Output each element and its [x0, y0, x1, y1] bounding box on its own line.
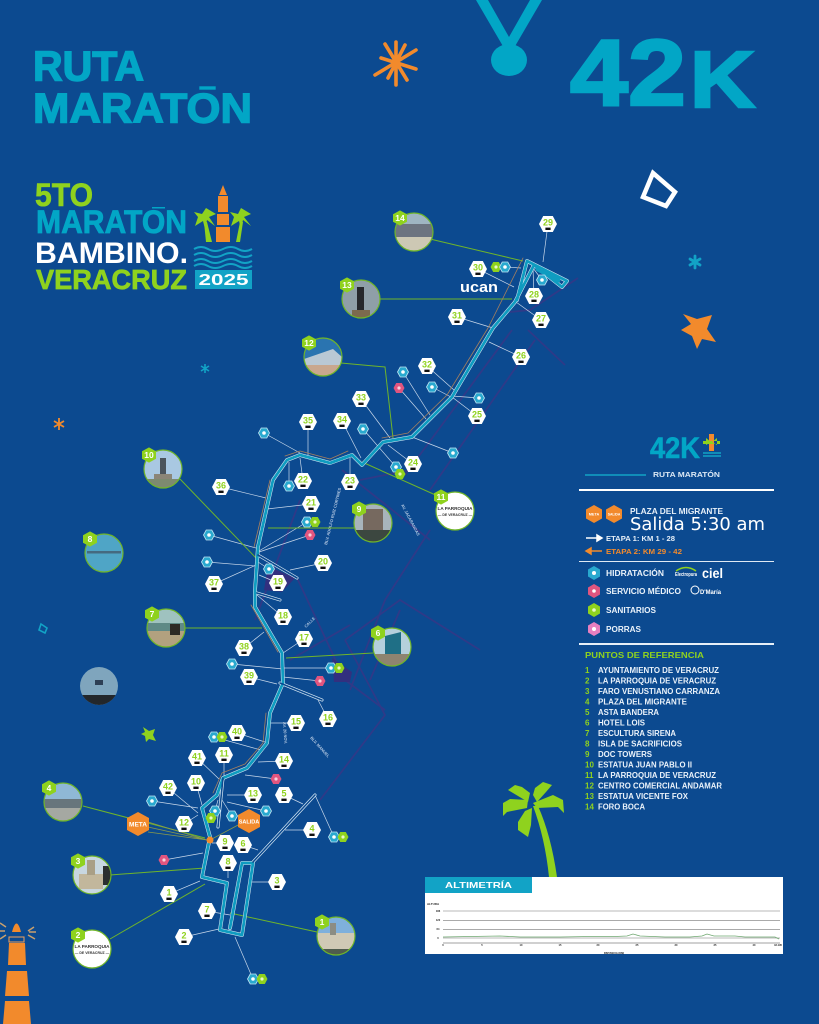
- kilometre markers: 26: [516, 350, 526, 360]
- photo 6: Hotel Lois: 6: [376, 628, 381, 638]
- kilometre markers: 27: [536, 314, 546, 324]
- kilometre markers: 16: [323, 712, 333, 722]
- kilometre markers: 2: [181, 930, 187, 940]
- x axis labels: 5: [481, 943, 483, 947]
- marker: meta: META: [129, 822, 147, 828]
- x axis labels: 10: [520, 943, 523, 947]
- y axis labels: 0: [437, 936, 439, 940]
- kilometre markers: 19: [273, 576, 283, 586]
- kilometre markers: 3: [274, 876, 280, 886]
- logo: 5to Maratón Bambino Veracruz 2025: 5TO: [35, 177, 93, 213]
- kilometre markers: 34: [337, 414, 347, 424]
- x axis labels: 15: [559, 943, 562, 947]
- list: reference points: LA PARROQUIA DE VERACRUZ: [598, 676, 716, 686]
- list: reference points: 6: [585, 718, 590, 728]
- icon: mini lighthouse and palms: [703, 434, 721, 456]
- legend: stage 1: ETAPA 1: KM 1 - 28: [606, 534, 675, 543]
- divider: [579, 489, 774, 491]
- kilometre markers: 40: [232, 726, 242, 736]
- leader lines: white: [152, 224, 548, 979]
- y axis labels: 64: [437, 927, 440, 931]
- photo 4: Plaza del Migrante: [42, 780, 82, 821]
- icon: toilets: [588, 603, 600, 617]
- icon: small diamond left: [39, 624, 47, 633]
- photo 11: La Parroquia: LA PARROQUIA: [438, 506, 473, 511]
- kilometre markers: 42: [163, 782, 173, 792]
- legend: plaza: PLAZA DEL MIGRANTE: [630, 506, 723, 516]
- icon: white arrow: [586, 535, 602, 541]
- photo 9: Doc Towers: 9: [357, 504, 362, 514]
- x axis labels: 35: [714, 943, 717, 947]
- list: reference points: 7: [585, 729, 590, 738]
- list: reference points: ISLA DE SACRIFICIOS: [598, 740, 683, 748]
- divider: [579, 561, 774, 562]
- photo 2: La Parroquia: LA PARROQUIA: [75, 944, 110, 949]
- kilometre markers: 23: [345, 476, 355, 486]
- photo 8: Isla de Sacrificios: [83, 531, 123, 572]
- icon: small orange star left: [54, 418, 64, 430]
- marker: meta: [127, 812, 149, 836]
- logo: D'María: D'María: [700, 589, 721, 596]
- photo 8: Isla de Sacrificios: 8: [88, 534, 93, 544]
- logo: 5to Maratón Bambino Veracruz 2025: [35, 177, 252, 295]
- photo 12: Centro Comercial Andamar: [302, 335, 342, 376]
- list: reference points: 3: [585, 687, 590, 696]
- icon: logo lighthouse: [216, 185, 230, 242]
- kilometre markers: 14: [279, 754, 289, 764]
- heading: 42K: K: [690, 35, 755, 124]
- list: reference points: 11: [585, 771, 594, 780]
- photo 7: Escultura Sirena: [145, 606, 185, 647]
- route line: [202, 258, 567, 935]
- legend: start time: Salida 5:30 am: [630, 514, 765, 535]
- photo 14: Foro Boca: [393, 210, 433, 251]
- icon: lighthouse bottom-left: [0, 923, 36, 1024]
- kilometre markers: 17: [299, 632, 309, 642]
- kilometre markers: 7: [204, 904, 210, 914]
- x axis labels: 25: [636, 943, 639, 947]
- icon: white diamond: [643, 173, 675, 206]
- legend: services: [588, 565, 723, 636]
- legend: cheering: PORRAS: [606, 625, 642, 634]
- photo 2: La Parroquia: [71, 927, 111, 968]
- axis title: ALTURA: [427, 902, 440, 906]
- icon: large palm tree: [503, 782, 564, 877]
- kilometre markers: 28: [529, 290, 539, 300]
- icon: cheering: [588, 622, 600, 636]
- list: reference points: 14: [585, 802, 594, 812]
- photo 10: Estatua Juan Pablo II: 10: [144, 450, 154, 460]
- photo 3: Faro Venustiano Carranza: [71, 853, 111, 894]
- list: reference points: AYUNTAMIENTO DE VERACRUZ: [598, 666, 719, 675]
- icon: orange arrow: [586, 548, 602, 554]
- list: reference points: 13: [585, 792, 594, 801]
- kilometre markers: 9: [222, 836, 228, 846]
- list: reference points: ESTATUA VICENTE FOX: [598, 792, 689, 801]
- kilometre markers: 6: [240, 838, 246, 848]
- x axis labels: 30: [675, 943, 678, 947]
- x axis title: DISTANCIA (KM): [604, 951, 624, 955]
- icon: medal: [476, 0, 542, 76]
- photo 10: Estatua Juan Pablo II: [142, 447, 182, 488]
- photo 14: Foro Boca: 14: [395, 213, 405, 223]
- kilometre markers: 11: [219, 748, 229, 758]
- list: reference points: CENTRO COMERCIAL ANDAMAR: [598, 782, 722, 790]
- list: reference points: ESCULTURA SIRENA: [598, 729, 676, 738]
- y axis labels: [436, 909, 441, 940]
- altimetry tab: [425, 877, 532, 893]
- icon: logo waves: [194, 247, 252, 268]
- hydration, medical and toilet markers: [146, 262, 548, 984]
- x axis labels: 20: [597, 943, 600, 947]
- list: reference points: ASTA BANDERA: [598, 708, 659, 717]
- list: reference points: 1: [585, 666, 590, 675]
- photo 4: Plaza del Migrante: 4: [47, 783, 52, 793]
- list: reference points: HOTEL LOIS: [598, 718, 646, 728]
- icon: small teal star: [690, 256, 700, 268]
- list: reference points: LA PARROQUIA DE VERACRUZ: [598, 771, 716, 780]
- y axis labels: 122: [436, 918, 441, 922]
- kilometre markers: 37: [209, 578, 219, 588]
- text: avenue labels: BLV. MANUEL: [309, 735, 331, 759]
- photo 11: La Parroquia: — DE VERACRUZ —: [438, 513, 473, 517]
- legend: meta hex: META: [589, 512, 599, 516]
- legend: route label: RUTA MARATÓN: [653, 470, 720, 479]
- photo 2: La Parroquia: 2: [76, 930, 81, 940]
- text: avenue labels: [282, 487, 421, 759]
- legend: salida hex: SALIDA: [608, 512, 621, 516]
- photo 1: Ayuntamiento de Veracruz: 1: [320, 917, 325, 927]
- photo 13: Estatua Vicente Fox: [340, 277, 380, 318]
- kilometre markers: 33: [356, 392, 366, 402]
- leader lines: green: [83, 239, 523, 939]
- x axis labels: 42.195: [774, 943, 783, 947]
- title: Ruta Maratón: MARATON: [33, 84, 252, 132]
- marker: start/finish dot: [206, 836, 214, 844]
- logo: ciel: ciel: [702, 565, 723, 581]
- list: reference points: 12: [585, 782, 594, 790]
- street network: [255, 278, 578, 800]
- logo: 5to Maratón Bambino Veracruz 2025: 2025: [198, 272, 249, 289]
- legend: salida hex: [606, 505, 622, 523]
- photo 3: Faro Venustiano Carranza: 3: [76, 856, 81, 866]
- panel: altimetry chart: [425, 877, 783, 955]
- legend: route line: [585, 474, 646, 476]
- text: avenue labels: CALLE: [303, 616, 316, 629]
- legend: start and finish: [586, 505, 765, 556]
- photo 1: Ayuntamiento de Veracruz: [315, 914, 355, 955]
- kilometre markers: 30: [473, 262, 483, 272]
- icon: medical: [588, 584, 600, 598]
- legend: stage 2: ETAPA 2: KM 29 - 42: [606, 547, 682, 556]
- heading: 42K: [570, 20, 755, 125]
- photo 11: La Parroquia: [434, 489, 474, 530]
- photo 2: La Parroquia: — DE VERACRUZ —: [75, 951, 110, 955]
- photo 13: Estatua Vicente Fox: 13: [342, 280, 352, 290]
- x axis labels: 40: [753, 943, 756, 947]
- legend: 42K route: [585, 432, 721, 479]
- marker: salida: [238, 809, 260, 833]
- x axis labels: 0: [442, 943, 444, 947]
- kilometre markers: 18: [278, 610, 288, 620]
- icon: orange star burst: [375, 42, 416, 85]
- list: reference points: FORO BOCA: [598, 802, 645, 812]
- icon: hydration: [588, 566, 600, 580]
- kilometre markers: 35: [303, 416, 313, 426]
- kilometre markers: 12: [179, 818, 189, 828]
- kilometre markers: 13: [248, 788, 258, 798]
- text: avenue labels: AV. JACARANDAS: [400, 503, 421, 537]
- legend: medical: SERVICIO MÉDICO: [606, 587, 681, 596]
- list: reference points: [585, 666, 722, 812]
- legend: 42K mark: 42K: [650, 432, 700, 465]
- kilometre markers: 10: [191, 776, 201, 786]
- kilometre markers: 29: [543, 218, 553, 228]
- x axis labels: [442, 943, 783, 947]
- heading: 42K: 42: [570, 20, 686, 125]
- kilometre markers: 15: [291, 716, 301, 726]
- list: reference points: 10: [585, 760, 594, 770]
- legend: meta hex: [586, 505, 602, 523]
- photo 12: Centro Comercial Andamar: 12: [304, 338, 314, 348]
- list: reference points: DOC TOWERS: [598, 750, 653, 759]
- kilometre markers: 31: [452, 310, 462, 320]
- kilometre markers: 24: [408, 458, 418, 468]
- photo: flag (Asta Bandera): [80, 667, 118, 705]
- kilometre markers: 4: [309, 824, 315, 834]
- list: reference points: 2: [585, 676, 590, 686]
- kilometre markers: 38: [239, 642, 249, 652]
- elevation line: [443, 934, 779, 939]
- kilometre markers: 20: [318, 556, 328, 566]
- list: reference points: ESTATUA JUAN PABLO II: [598, 760, 692, 770]
- legend: hydration: HIDRATACIÓN: [606, 569, 664, 578]
- kilometre markers: 5: [281, 788, 287, 798]
- kilometre markers: 39: [244, 670, 254, 680]
- title: Ruta Maratón: [33, 42, 252, 132]
- text: avenue labels: BLV. ADOLFO RUIZ CORTINES: [323, 487, 342, 545]
- kilometre markers: 36: [216, 480, 226, 490]
- kilometre markers: 32: [422, 360, 432, 370]
- logo: 5to Maratón Bambino Veracruz 2025: VERACRUZ: [36, 264, 187, 295]
- list: reference points: 4: [585, 698, 590, 706]
- photo 11: La Parroquia: 11: [436, 492, 446, 502]
- icon: logo palms: [194, 208, 251, 242]
- icon: orange star: [681, 314, 716, 349]
- kilometre markers: 22: [298, 474, 308, 484]
- kilometre markers: 8: [225, 856, 231, 866]
- divider: [579, 643, 774, 645]
- kilometre markers: 1: [166, 888, 172, 898]
- marker: salida: SALIDA: [239, 820, 259, 826]
- list: reference points: 5: [585, 708, 590, 717]
- kilometre markers: 41: [192, 752, 202, 762]
- kilometre markers: 21: [306, 498, 316, 508]
- logo: ucan: ucan: [460, 279, 498, 296]
- heading: puntos de referencia: PUNTOS DE REFERENCIA: [585, 650, 704, 660]
- text: avenue labels: AV. 20 NOV.: [282, 722, 289, 744]
- list: reference points: FARO VENUSTIANO CARRANZA: [598, 687, 720, 696]
- photo 9: Doc Towers: [352, 501, 392, 542]
- kilometre markers: [159, 216, 557, 945]
- icon: green star: [141, 727, 156, 742]
- logo: Electropura: Electropura: [675, 572, 697, 578]
- list: reference points: 9: [585, 750, 590, 759]
- logo: 5to Maratón Bambino Veracruz 2025: MARATON: [36, 204, 187, 240]
- icon: small teal star left: [201, 364, 209, 373]
- y axis labels: 186: [436, 909, 441, 913]
- kilometre markers: 25: [472, 410, 482, 420]
- photo 7: Escultura Sirena: 7: [150, 609, 155, 619]
- logo: 5to Maratón Bambino Veracruz 2025: BAMBINO.: [35, 237, 188, 270]
- altimetry heading: ALTIMETRÍA: [445, 880, 512, 890]
- title: Ruta Maratón: RUTA: [33, 42, 144, 90]
- list: reference points: 8: [585, 740, 590, 748]
- list: reference points: PLAZA DEL MIGRANTE: [598, 698, 688, 706]
- legend: toilets: SANITARIOS: [606, 606, 657, 615]
- photo 6: Hotel Lois: [371, 625, 411, 666]
